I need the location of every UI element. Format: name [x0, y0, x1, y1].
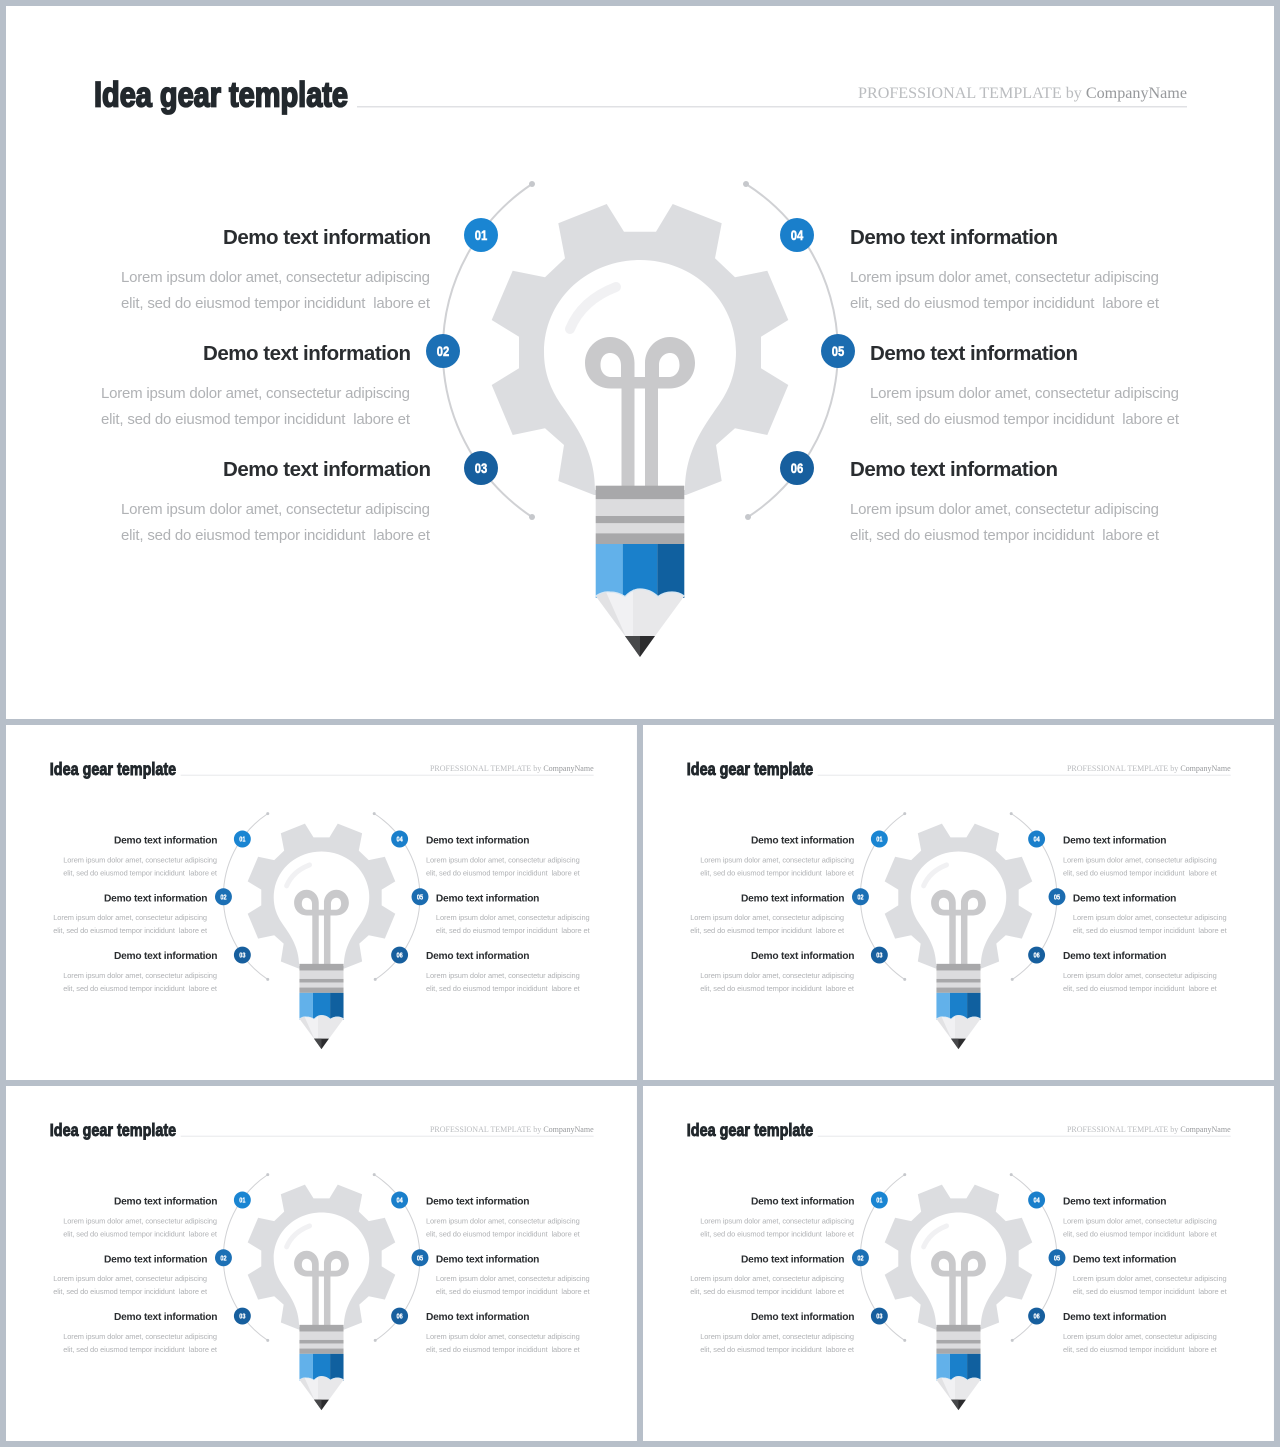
thumbnail title: Idea gear template — [50, 1120, 176, 1140]
thumbnail arcs and badges — [852, 812, 1065, 981]
text block 06: Demo text information — [850, 458, 1058, 481]
thumbnail text blocks: elit, sed do eiusmod tempor incididunt labore et — [426, 868, 581, 877]
text block 03: Demo text information — [223, 458, 431, 481]
thumbnail text blocks: 01 — [876, 1198, 883, 1205]
thumbnail text blocks: Lorem ipsum dolor amet, consectetur adipiscing — [1063, 1216, 1217, 1225]
thumbnail text blocks: elit, sed do eiusmod tempor incididunt labore et — [700, 1345, 855, 1354]
thumbnail text blocks: elit, sed do eiusmod tempor incididunt labore et — [700, 984, 855, 993]
thumbnail text blocks: 02 — [857, 894, 864, 901]
thumbnail text blocks: 01 — [239, 1198, 246, 1205]
thumbnail text blocks: Demo text information — [751, 1312, 854, 1323]
thumbnail text blocks: Demo text information — [104, 893, 208, 904]
text block 05: Demo text information — [870, 342, 1078, 365]
thumbnail text blocks: 04 — [1033, 1198, 1040, 1205]
thumbnail text blocks: Lorem ipsum dolor amet, consectetur adipiscing — [1063, 971, 1217, 980]
thumbnail text blocks: Demo text information — [751, 835, 854, 847]
thumbnail text blocks: elit, sed do eiusmod tempor incididunt labore et — [426, 1229, 581, 1238]
badge numbers: 03 — [475, 460, 487, 476]
thumbnail text blocks: 06 — [396, 1314, 403, 1321]
thumbnail text blocks: Lorem ipsum dolor amet, consectetur adipiscing — [53, 913, 207, 922]
thumbnail text blocks: Lorem ipsum dolor amet, consectetur adipiscing — [690, 913, 844, 922]
thumbnail text blocks: 01 — [876, 837, 883, 844]
thumbnail text blocks: Lorem ipsum dolor amet, consectetur adipiscing — [436, 1274, 590, 1283]
thumbnail text blocks: 03 — [876, 1314, 883, 1321]
text block 03: elit, sed do eiusmod tempor incididunt labore et — [121, 527, 431, 544]
thumbnail text blocks: Demo text information — [741, 1254, 845, 1265]
text block 01: elit, sed do eiusmod tempor incididunt labore et — [121, 295, 431, 312]
thumbnail text blocks: elit, sed do eiusmod tempor incididunt labore et — [1073, 926, 1228, 935]
thumbnail text blocks: elit, sed do eiusmod tempor incididunt labore et — [63, 868, 218, 877]
badge numbers: 06 — [791, 460, 803, 476]
badge numbers — [437, 227, 844, 476]
thumbnail text blocks: Lorem ipsum dolor amet, consectetur adipiscing — [700, 1332, 854, 1341]
thumbnail text blocks: Lorem ipsum dolor amet, consectetur adipiscing — [426, 1216, 580, 1225]
text block 05: elit, sed do eiusmod tempor incididunt labore et — [870, 411, 1180, 428]
thumbnail text blocks: elit, sed do eiusmod tempor incididunt labore et — [436, 1287, 591, 1296]
thumbnail text blocks: elit, sed do eiusmod tempor incididunt labore et — [436, 926, 591, 935]
thumbnail text blocks: 04 — [396, 1198, 403, 1205]
text block 06: Lorem ipsum dolor amet, consectetur adipiscing — [850, 501, 1159, 518]
thumbnail title: Idea gear template — [50, 759, 176, 779]
thumbnail text blocks: Lorem ipsum dolor amet, consectetur adipiscing — [63, 971, 217, 980]
thumbnail text blocks: elit, sed do eiusmod tempor incididunt labore et — [426, 1345, 581, 1354]
thumbnail text blocks: 05 — [417, 894, 423, 901]
thumbnail text blocks: Demo text information — [114, 1196, 217, 1208]
badge numbers: 01 — [475, 227, 487, 243]
text block 04: Lorem ipsum dolor amet, consectetur adipiscing — [850, 269, 1159, 286]
thumbnail text blocks: Lorem ipsum dolor amet, consectetur adipiscing — [63, 1332, 217, 1341]
thumbnail text blocks: Lorem ipsum dolor amet, consectetur adipiscing — [700, 1216, 854, 1225]
text block 03 — [121, 458, 431, 544]
text block 03: Lorem ipsum dolor amet, consectetur adipiscing — [121, 501, 430, 518]
thumbnail text blocks: 03 — [239, 1314, 246, 1321]
gear — [492, 204, 788, 495]
thumbnail text blocks: elit, sed do eiusmod tempor incididunt labore et — [53, 926, 208, 935]
text block 06: elit, sed do eiusmod tempor incididunt labore et — [850, 527, 1160, 544]
thumbnail text blocks — [690, 835, 1228, 993]
thumbnail text blocks: elit, sed do eiusmod tempor incididunt labore et — [1063, 868, 1218, 877]
thumbnail text blocks: Lorem ipsum dolor amet, consectetur adipiscing — [63, 1216, 217, 1225]
thumbnail text blocks: 02 — [857, 1255, 864, 1262]
thumbnail text blocks: Lorem ipsum dolor amet, consectetur adipiscing — [53, 1274, 207, 1283]
panel: thumbnail slide bottom right — [643, 1086, 1274, 1441]
thumbnail illustration — [248, 1185, 395, 1410]
thumbnail text blocks: Lorem ipsum dolor amet, consectetur adipiscing — [426, 971, 580, 980]
thumbnail text blocks: 05 — [1054, 894, 1060, 901]
thumbnail arcs and badges — [215, 812, 428, 981]
panel: main slide — [6, 6, 1274, 719]
text block 01: Demo text information — [223, 226, 431, 249]
panel: thumbnail slide top right — [643, 725, 1274, 1080]
text block 02 — [101, 342, 411, 428]
thumbnail text blocks: Demo text information — [104, 1254, 208, 1265]
thumbnail text blocks: 02 — [220, 1255, 227, 1262]
text block 04 — [850, 226, 1160, 312]
text block 02: Demo text information — [203, 342, 411, 365]
text block 05: Lorem ipsum dolor amet, consectetur adipiscing — [870, 385, 1179, 402]
thumbnail text blocks: Lorem ipsum dolor amet, consectetur adipiscing — [426, 1332, 580, 1341]
thumbnail subtitle: PROFESSIONAL TEMPLATE by CompanyName — [430, 764, 594, 773]
thumbnail text blocks: 01 — [239, 837, 246, 844]
thumbnail text blocks: 05 — [1054, 1255, 1060, 1262]
thumbnail text blocks: elit, sed do eiusmod tempor incididunt labore et — [53, 1287, 208, 1296]
thumbnail text blocks: elit, sed do eiusmod tempor incididunt labore et — [1073, 1287, 1228, 1296]
thumbnail text blocks: 03 — [239, 953, 246, 960]
pencil — [596, 486, 684, 657]
thumbnail text blocks: 06 — [396, 953, 403, 960]
text block 02: Lorem ipsum dolor amet, consectetur adipiscing — [101, 385, 410, 402]
thumbnail text blocks: elit, sed do eiusmod tempor incididunt labore et — [1063, 984, 1218, 993]
thumbnail illustration — [885, 1185, 1032, 1410]
thumbnail text blocks: elit, sed do eiusmod tempor incididunt labore et — [700, 1229, 855, 1238]
bulb — [544, 260, 736, 490]
thumbnail text blocks: 03 — [876, 953, 883, 960]
thumbnail text blocks: Demo text information — [1063, 951, 1166, 962]
thumbnail text blocks — [690, 1196, 1228, 1354]
panel: thumbnail slide bottom left — [6, 1086, 637, 1441]
bulb highlight — [570, 287, 616, 329]
thumbnail text blocks: elit, sed do eiusmod tempor incididunt labore et — [63, 1229, 218, 1238]
text block 04: Demo text information — [850, 226, 1058, 249]
subtitle: PROFESSIONAL TEMPLATE by CompanyName — [858, 85, 1187, 102]
thumbnail text blocks: Lorem ipsum dolor amet, consectetur adipiscing — [690, 1274, 844, 1283]
filament — [585, 337, 695, 490]
panel: thumbnail slide top left — [6, 725, 637, 1080]
thumbnail text blocks: Lorem ipsum dolor amet, consectetur adipiscing — [700, 971, 854, 980]
badge numbers: 05 — [832, 343, 844, 359]
thumbnail arcs and badges — [852, 1173, 1065, 1342]
thumbnail text blocks: Demo text information — [751, 951, 854, 962]
thumbnail text blocks: elit, sed do eiusmod tempor incididunt labore et — [63, 1345, 218, 1354]
text block 06 — [850, 458, 1160, 544]
text block 05 — [870, 342, 1180, 428]
thumbnail arcs and badges — [215, 1173, 428, 1342]
thumbnail text blocks: elit, sed do eiusmod tempor incididunt labore et — [700, 868, 855, 877]
thumbnail text blocks: elit, sed do eiusmod tempor incididunt labore et — [426, 984, 581, 993]
thumbnail illustration — [885, 824, 1032, 1049]
title: Idea gear template — [94, 76, 348, 114]
thumbnail text blocks: elit, sed do eiusmod tempor incididunt labore et — [690, 1287, 845, 1296]
thumbnail text blocks: 06 — [1033, 1314, 1040, 1321]
thumbnail text blocks: Demo text information — [1063, 1312, 1166, 1323]
thumbnail text blocks: 05 — [417, 1255, 423, 1262]
thumbnail text blocks: 04 — [1033, 837, 1040, 844]
badge numbers: 04 — [791, 227, 803, 243]
text block 01 — [121, 226, 431, 312]
thumbnail text blocks: Demo text information — [426, 835, 529, 847]
thumbnail title: Idea gear template — [687, 1120, 813, 1140]
thumbnail text blocks: Lorem ipsum dolor amet, consectetur adipiscing — [436, 913, 590, 922]
text block 01: Lorem ipsum dolor amet, consectetur adipiscing — [121, 269, 430, 286]
thumbnail text blocks: 06 — [1033, 953, 1040, 960]
thumbnail text blocks: Lorem ipsum dolor amet, consectetur adipiscing — [1073, 1274, 1227, 1283]
thumbnail text blocks — [53, 1196, 591, 1354]
thumbnail text blocks: Demo text information — [436, 893, 539, 904]
thumbnail subtitle: PROFESSIONAL TEMPLATE by CompanyName — [1067, 764, 1231, 773]
thumbnail text blocks: Demo text information — [114, 835, 217, 847]
thumbnail text blocks: Demo text information — [1073, 893, 1176, 904]
thumbnail text blocks: Demo text information — [114, 951, 217, 962]
illustration: gear bulb pencil — [492, 204, 788, 657]
thumbnail illustration — [248, 824, 395, 1049]
thumbnail text blocks: Lorem ipsum dolor amet, consectetur adipiscing — [426, 855, 580, 864]
thumbnail title: Idea gear template — [687, 759, 813, 779]
thumbnail text blocks — [53, 835, 591, 993]
thumbnail text blocks: Demo text information — [436, 1254, 539, 1265]
text block 02: elit, sed do eiusmod tempor incididunt labore et — [101, 411, 411, 428]
thumbnail text blocks: Demo text information — [426, 1312, 529, 1323]
thumbnail text blocks: 02 — [220, 894, 227, 901]
thumbnail text blocks: Lorem ipsum dolor amet, consectetur adipiscing — [1063, 855, 1217, 864]
arcs and badges — [426, 181, 855, 520]
text block 04: elit, sed do eiusmod tempor incididunt labore et — [850, 295, 1160, 312]
thumbnail text blocks: elit, sed do eiusmod tempor incididunt labore et — [63, 984, 218, 993]
thumbnail text blocks: Demo text information — [426, 951, 529, 962]
thumbnail text blocks: Demo text information — [426, 1196, 529, 1208]
thumbnail text blocks: Demo text information — [1063, 1196, 1166, 1208]
thumbnail text blocks: Lorem ipsum dolor amet, consectetur adipiscing — [63, 855, 217, 864]
thumbnail text blocks: 04 — [396, 837, 403, 844]
thumbnail text blocks: Demo text information — [751, 1196, 854, 1208]
thumbnail text blocks: Demo text information — [741, 893, 845, 904]
thumbnail text blocks: elit, sed do eiusmod tempor incididunt labore et — [1063, 1345, 1218, 1354]
thumbnail text blocks: elit, sed do eiusmod tempor incididunt labore et — [690, 926, 845, 935]
thumbnail text blocks: Demo text information — [114, 1312, 217, 1323]
thumbnail text blocks: Lorem ipsum dolor amet, consectetur adipiscing — [1073, 913, 1227, 922]
thumbnail text blocks: Demo text information — [1063, 835, 1166, 847]
thumbnail text blocks: Lorem ipsum dolor amet, consectetur adipiscing — [1063, 1332, 1217, 1341]
thumbnail text blocks: Demo text information — [1073, 1254, 1176, 1265]
thumbnail subtitle: PROFESSIONAL TEMPLATE by CompanyName — [430, 1125, 594, 1134]
thumbnail subtitle: PROFESSIONAL TEMPLATE by CompanyName — [1067, 1125, 1231, 1134]
thumbnail text blocks: elit, sed do eiusmod tempor incididunt labore et — [1063, 1229, 1218, 1238]
badge numbers: 02 — [437, 343, 449, 359]
thumbnail text blocks: Lorem ipsum dolor amet, consectetur adipiscing — [700, 855, 854, 864]
